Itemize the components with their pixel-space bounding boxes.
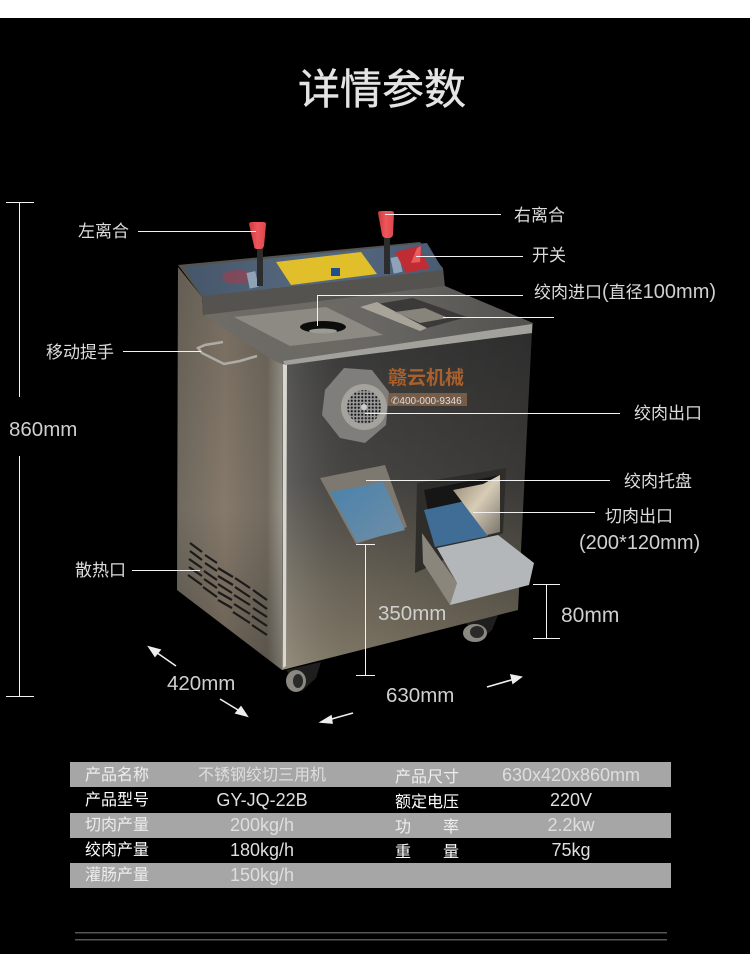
specification table: 额定电压 (395, 793, 459, 811)
callout labels: 绞肉出口 (634, 404, 702, 423)
callout labels: 散热口 (75, 561, 126, 580)
vents (188, 543, 267, 635)
specification table: 率 (443, 818, 459, 836)
specification table: 不锈钢绞切三用机 (198, 766, 326, 784)
specification table: 功 (395, 818, 411, 836)
specification table: GY-JQ-22B (216, 790, 308, 810)
dimension labels (9, 418, 619, 707)
left lever (246, 222, 266, 289)
callout labels: 右离合 (514, 206, 565, 225)
callout labels: 左离合 (78, 222, 129, 241)
callout labels: 绞肉托盘 (624, 472, 692, 491)
specification table: 630x420x860mm (502, 765, 640, 785)
specification table: 产品名称 (85, 766, 149, 784)
handle (198, 342, 257, 364)
callout labels: 开关 (532, 246, 566, 265)
specification table: 75kg (551, 840, 591, 860)
watermark logo: 赣云机械 (388, 366, 464, 389)
specification table: 切肉产量 (85, 816, 149, 834)
specification table (70, 762, 671, 888)
specification table: 量 (443, 844, 459, 861)
corner highlight (283, 363, 287, 668)
slicer inlet (360, 298, 467, 330)
specification table: 200kg/h (230, 815, 294, 835)
dimension labels: 80mm (561, 604, 619, 627)
specification table: 灌肠产量 (85, 866, 149, 884)
control panel (178, 211, 445, 316)
dimension labels: 420mm (167, 672, 235, 695)
specification table: 2.2kw (547, 815, 596, 835)
grinder outlet (322, 368, 389, 443)
dimension labels: 860mm (9, 418, 77, 441)
casters (286, 615, 498, 692)
callout labels: 移动提手 (46, 343, 114, 362)
top plate (203, 286, 533, 365)
callout labels: (200*120mm) (579, 532, 700, 554)
specification table: 180kg/h (230, 840, 294, 860)
specification table: 重 (395, 843, 411, 861)
dimension labels: 350mm (378, 602, 446, 625)
cabinet front (282, 330, 532, 670)
title: 详情参数 (298, 66, 466, 113)
specification table: 产品型号 (85, 791, 149, 809)
specification table: 150kg/h (230, 865, 294, 885)
callout labels: 绞肉进口(直径100mm) (534, 281, 716, 303)
mincer tray (320, 465, 407, 544)
dimension arrows (149, 647, 521, 723)
red switch (395, 246, 430, 273)
footer divider lines (75, 932, 667, 940)
right lever (378, 211, 403, 274)
machine illustration (177, 211, 534, 692)
callout labels: 切肉出口 (605, 507, 673, 526)
watermark logo (388, 366, 467, 407)
watermark logo: ✆400-000-9346 (391, 396, 462, 407)
specification table: 产品尺寸 (395, 768, 459, 786)
specification table: 绞肉产量 (85, 841, 149, 859)
top white strip (0, 0, 750, 18)
dimension labels: 630mm (386, 684, 454, 707)
specification table: 220V (550, 790, 592, 810)
warning label (276, 252, 377, 285)
callout labels (46, 206, 716, 580)
callouts and dimension lines (6, 202, 620, 696)
cabinet side (177, 267, 283, 670)
slicer outlet (415, 468, 534, 605)
